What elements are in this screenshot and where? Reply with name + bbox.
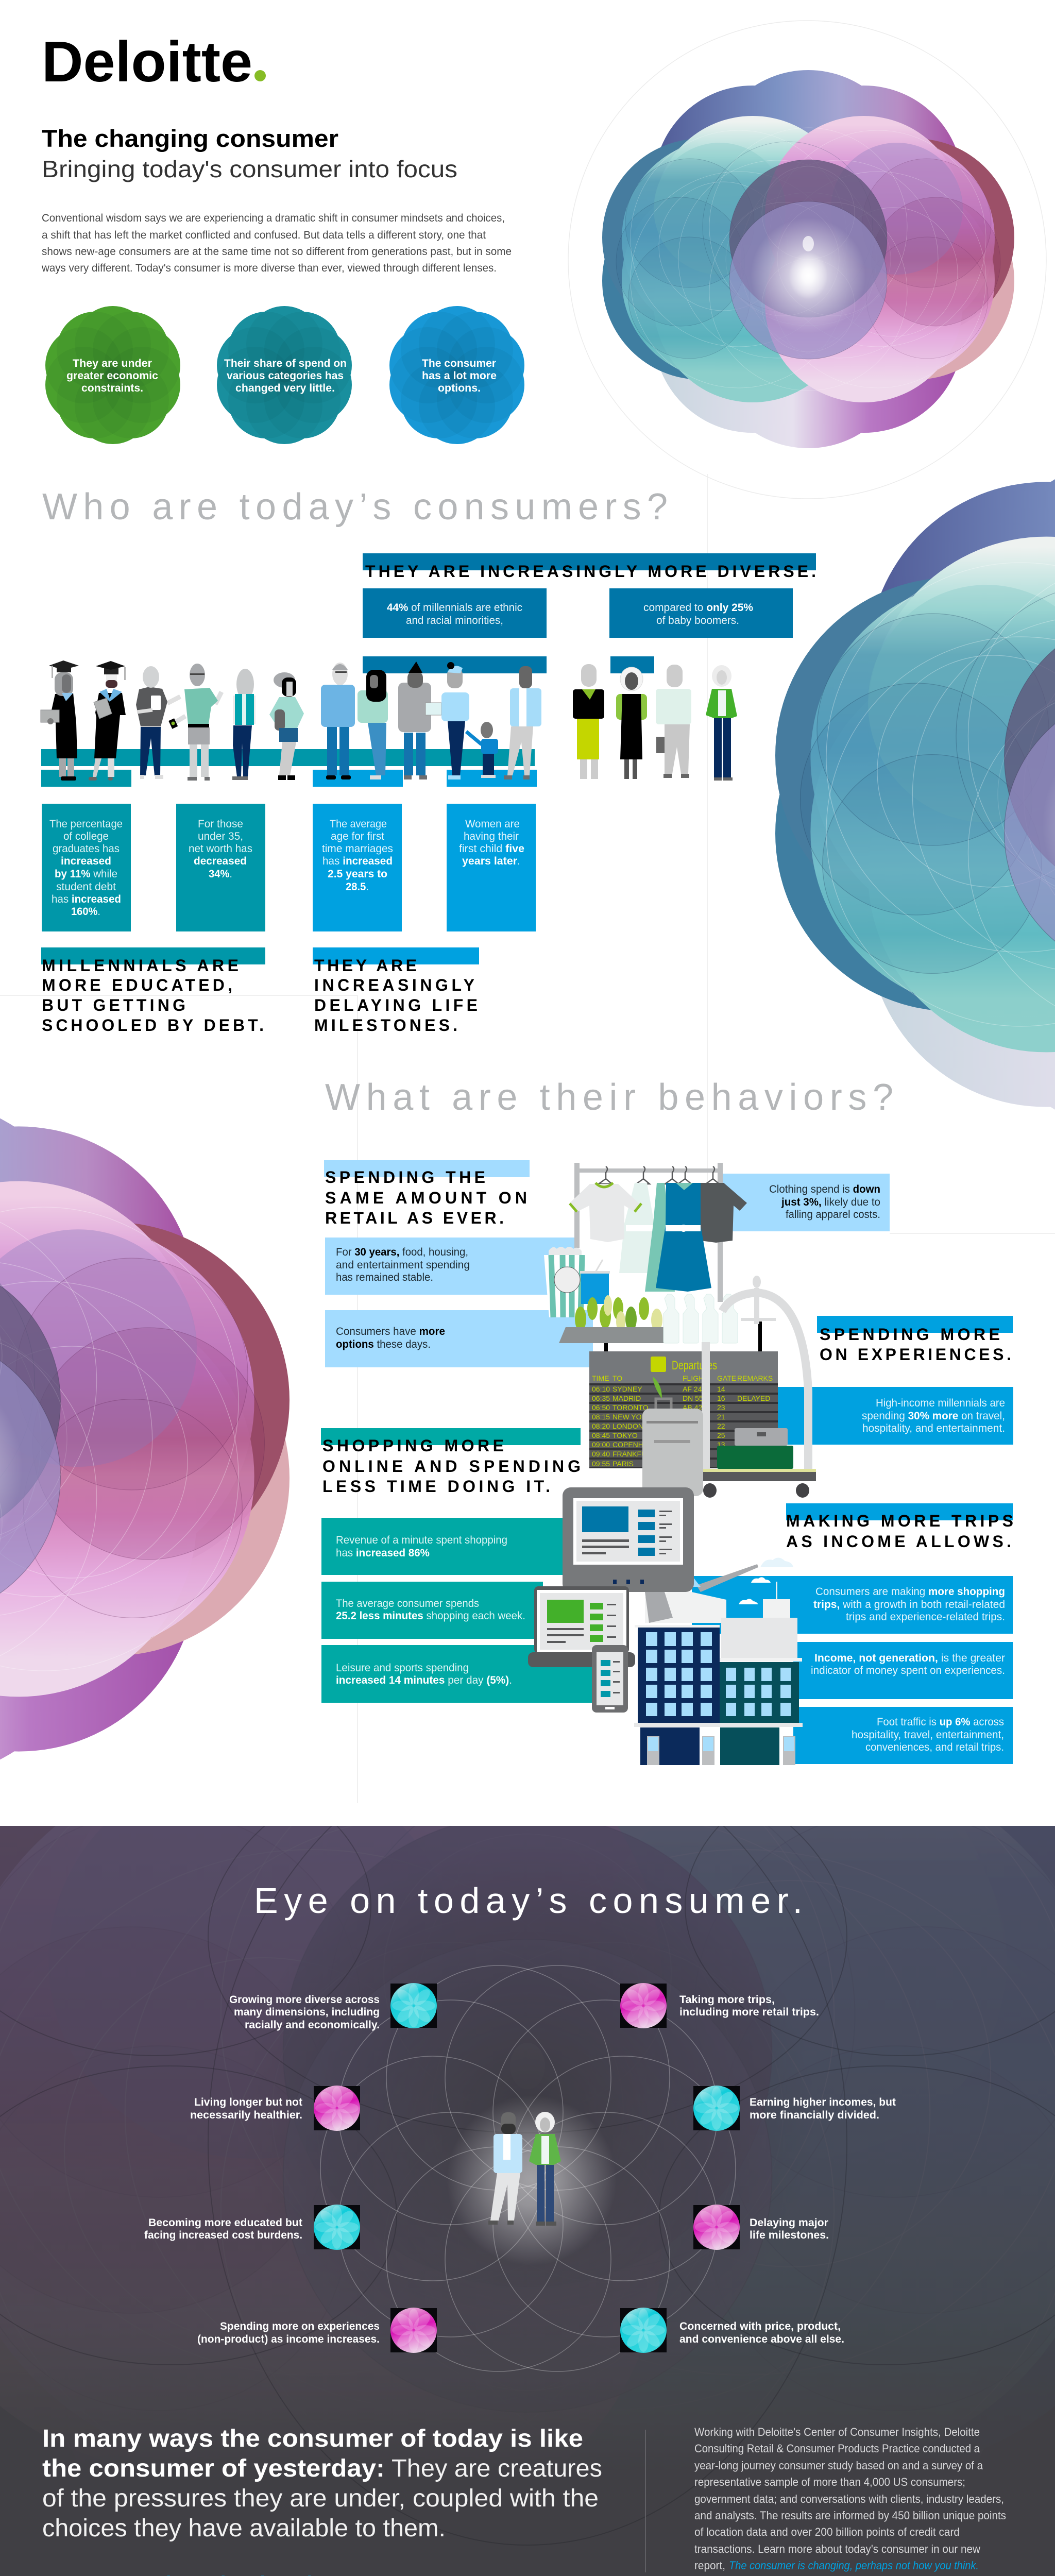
illustration: departures board: TIME [592, 1374, 609, 1382]
text box: clothing spend: falling apparel costs. [786, 1209, 880, 1221]
illustration: pears crate [559, 1295, 670, 1343]
heading: shopping online: LESS TIME DOING IT. [322, 1477, 550, 1496]
illustration: man in hoodie [398, 662, 441, 779]
text box: more options: options these days. [336, 1338, 431, 1350]
text box: foot traffic [793, 1707, 1013, 1764]
illustration: man in blue shirt [321, 663, 355, 779]
illustration: departures board: 14 [717, 1385, 725, 1393]
heading: delaying life milestones: THEY ARE [314, 956, 417, 975]
badge: share of spend [217, 306, 352, 444]
methodology paragraph: report, [694, 2559, 725, 2572]
stat box: net worth [176, 804, 265, 931]
stat box: millennials minorities: 44% of millennials are ethnic [387, 602, 522, 614]
text box: shopping trips: Consumers are making more shopping [815, 1586, 1005, 1598]
methodology paragraph: representative sample of more than 4,000 US consumers; [694, 2476, 965, 2488]
item: higher incomes: more financially divided. [750, 2109, 879, 2121]
text box: less minutes: The average consumer spends [336, 1598, 479, 1609]
illustration: couple [488, 2112, 561, 2226]
heading: making more trips: AS INCOME ALLOWS. [786, 1532, 1011, 1551]
illustration: departures board: 25 [717, 1431, 725, 1439]
text box: revenue per minute: has increased 86% [336, 1547, 430, 1559]
heading: delaying life milestones: DELAYING LIFE [314, 996, 478, 1014]
item: living longer [190, 2086, 360, 2131]
text box: clothing spend: Clothing spend is down [769, 1183, 880, 1195]
heading: shopping online [321, 1428, 581, 1496]
item: higher incomes [693, 2086, 896, 2131]
stat box: first child: having their [464, 831, 519, 842]
illustration: departures board: FRANKFURT [612, 1450, 656, 1458]
illustration: man with tablet [136, 666, 180, 779]
illustration: milk bottles [663, 1294, 738, 1343]
stat box: first child: first child five [459, 843, 524, 855]
methodology paragraph: transactions. Learn more about today's consumer in our new [694, 2543, 980, 2555]
stat box: baby boomers: compared to only 25% [643, 602, 753, 614]
text box: more options [325, 1310, 593, 1367]
conclusion statement: They are creatures [392, 2455, 602, 2482]
stat box: first child: years later. [462, 855, 520, 867]
illustration: departures board: DN 55 [683, 1394, 703, 1402]
item: delaying milestones: life milestones. [750, 2229, 829, 2241]
heading: delaying life milestones [313, 947, 479, 1035]
item: living longer: necessarily healthier. [190, 2109, 302, 2121]
text box: high-income millennials [773, 1387, 1013, 1445]
text box: less minutes: 25.2 less minutes shopping each week. [336, 1610, 525, 1622]
methodology paragraph: year-long journey consumer study based on and a survey of a [694, 2459, 983, 2472]
stat box: college graduates: has increased [52, 893, 121, 905]
illustration: top flower [602, 70, 1014, 448]
text box: income not generation: indicator of money spent on experiences. [811, 1665, 1005, 1676]
illustration: departures board: Departures [672, 1359, 717, 1372]
heading: delaying life milestones: INCREASINGLY [314, 976, 474, 994]
stat box: college graduates: student debt [56, 881, 116, 893]
heading: making more trips: MAKING MORE TRIPS [786, 1512, 1013, 1530]
heading: eye on today's consumer: Eye on today’s consumer. [254, 1880, 803, 1921]
illustration: graduate woman [41, 660, 79, 781]
illustration: departures board: AF 247 [683, 1385, 706, 1393]
text box: 30 years: and entertainment spending [336, 1259, 470, 1271]
stat box: millennials minorities: and racial minorities, [406, 615, 503, 626]
stat box: millennials minorities [363, 588, 547, 638]
heading: millennials: MILLENNIALS ARE [42, 956, 239, 975]
badge: economic constraints: They are under [73, 358, 152, 369]
item: educated: facing increased cost burdens. [144, 2229, 302, 2241]
illustration: departures board: 09:00 [592, 1440, 610, 1449]
text box: clothing spend: just 3%, likely due to [781, 1196, 880, 1208]
faint background rings and guide lines [0, 21, 1055, 1803]
text box: 30 years: For 30 years, food, housing, [336, 1246, 468, 1258]
stat box: net worth: decreased [194, 855, 247, 867]
stat box: baby boomers [609, 588, 793, 638]
heading: more on experiences: SPENDING MORE [820, 1325, 1000, 1344]
illustration: desktop monitor [563, 1487, 694, 1623]
divider [645, 2430, 646, 2572]
stat box: college graduates: of college [63, 831, 109, 842]
illustration: smartphone [592, 1645, 628, 1713]
heading: millennials: SCHOOLED BY DEBT. [42, 1016, 264, 1035]
item: trips: including more retail trips. [679, 2006, 819, 2018]
stat box: first child [447, 804, 536, 931]
conclusion statement [42, 2425, 602, 2542]
illustration: departures board: 23 [717, 1403, 725, 1412]
illustration: graduate man [89, 661, 126, 781]
illustration: woman black dress [616, 667, 647, 779]
methodology paragraph: The consumer is changing, perhaps not how you think. [729, 2559, 979, 2572]
methodology paragraph [694, 2426, 1006, 2572]
text box: 30 years [325, 1238, 577, 1295]
illustration: departures board: LONDON [612, 1422, 643, 1430]
title [42, 125, 457, 182]
stat box: first marriages: 2.5 years to [328, 868, 387, 880]
methodology paragraph: Working with Deloitte's Center of Consumer Insights, Deloitte [694, 2426, 980, 2438]
item: higher incomes: Earning higher incomes, but [750, 2096, 896, 2108]
badge: share of spend: changed very little. [235, 382, 335, 394]
illustration: right flower [775, 454, 1055, 1135]
heading: increasingly diverse [363, 553, 816, 581]
stat box: first marriages [313, 804, 402, 931]
illustration: departures board: 16 [717, 1394, 725, 1402]
conclusion statement: In many ways the consumer of today is like [42, 2425, 583, 2452]
heading: shopping online: SHOPPING MORE [322, 1436, 504, 1455]
illustration: departures board: 09:40 [592, 1450, 610, 1458]
intro paragraph: Conventional wisdom says we are experiencing a dramatic shift in consumer mindsets and choices, [42, 212, 505, 224]
illustration: departures board: SYDNEY [612, 1385, 642, 1393]
stat box: first marriages: 28.5. [346, 881, 369, 893]
illustration: woman with backpack [269, 672, 304, 780]
badge: more options [389, 306, 524, 444]
heading: making more trips [786, 1503, 1013, 1551]
illustration: departures board: 09:55 [592, 1460, 610, 1468]
illustration: departures board: REMARKS [737, 1374, 773, 1382]
illustration: older man lime trousers [573, 664, 604, 779]
stat box: college graduates [42, 804, 131, 931]
methodology paragraph: government data; and conversations with clients, industry leaders, [694, 2493, 1004, 2505]
text box: foot traffic: conveniences, and retail trips. [865, 1741, 1004, 1753]
heading: who are today's consumers: Who are today’s consumers? [42, 486, 668, 528]
illustration: man with bag [656, 665, 691, 778]
item: living longer: Living longer but not [194, 2096, 302, 2108]
text box: leisure and sports [321, 1645, 594, 1703]
item: trips [620, 1983, 819, 2028]
heading: spending the same on retail [324, 1160, 530, 1227]
heading: what are their behaviors: What are their behaviors? [325, 1077, 893, 1118]
illustration: departures board: TOKYO [612, 1431, 638, 1439]
heading: spending the same on retail: SAME AMOUNT ON [325, 1189, 527, 1207]
illustration: woman green jacket [706, 665, 737, 781]
heading: shopping online: ONLINE AND SPENDING [322, 1457, 581, 1476]
heading: more on experiences: ON EXPERIENCES. [820, 1345, 1011, 1364]
item: educated [144, 2205, 360, 2250]
illustration: city skyline [634, 1557, 803, 1765]
text box: clothing spend [721, 1174, 890, 1231]
item: experiences [197, 2308, 437, 2353]
item: diverse [229, 1983, 437, 2031]
item: delaying milestones [693, 2205, 829, 2250]
stat box: college graduates: 160%. [71, 906, 100, 918]
badge: economic constraints: greater economic [66, 370, 158, 382]
methodology paragraph: Consulting Retail & Consumer Products Practice conducted a [694, 2442, 980, 2455]
text box: leisure and sports: Leisure and sports spending [336, 1662, 469, 1674]
stat box: first marriages: time marriages [322, 843, 393, 855]
stat box: first marriages: has increased [322, 855, 393, 867]
text box: shopping trips [692, 1576, 1013, 1634]
text box: more options: Consumers have more [336, 1326, 445, 1337]
heading: delaying life milestones: MILESTONES. [314, 1016, 457, 1035]
item: educated: Becoming more educated but [148, 2217, 302, 2229]
item: price product convenience: Concerned with price, product, [679, 2320, 841, 2332]
illustration: man in blazer [504, 666, 541, 779]
illustration: departures board: MADRID [612, 1394, 641, 1402]
heading: millennials: BUT GETTING [42, 996, 185, 1014]
item: price product convenience [620, 2308, 844, 2353]
text box: foot traffic: hospitality, travel, entertainment, [852, 1729, 1004, 1741]
heading: more on experiences [817, 1316, 1013, 1364]
item: diverse: many dimensions, including [234, 2006, 380, 2018]
illustration: departures board: 08:20 [592, 1422, 610, 1430]
text box: leisure and sports: increased 14 minutes per day (5%). [336, 1674, 512, 1686]
badge: economic constraints: constraints. [81, 382, 143, 394]
text box: less minutes [321, 1582, 543, 1639]
badge: more options: The consumer [422, 358, 496, 369]
illustration: departures board: 06:50 [592, 1403, 610, 1412]
conclusion statement: of the pressures they are under, coupled with the [42, 2485, 599, 2512]
stat box: net worth: under 35, [198, 831, 243, 842]
illustration: grey suitcase [642, 1377, 703, 1496]
stat box: net worth: For those [198, 818, 243, 830]
heading: spending the same on retail: SPENDING THE [325, 1168, 485, 1187]
methodology paragraph: of location data and over 200 billion points of credit card [694, 2526, 960, 2538]
stat box: college graduates: increased [61, 855, 111, 867]
stat box: first child: Women are [465, 818, 520, 830]
stat box: net worth: net worth has [189, 843, 252, 855]
item: experiences: (non-product) as income increases. [197, 2333, 380, 2345]
illustration: departures board: TORONTO [612, 1403, 649, 1412]
illustration: departures board: FLIGHT [683, 1374, 708, 1382]
title: Bringing today's consumer into focus [42, 156, 457, 182]
text box: shopping trips: trips and experience-related trips. [846, 1611, 1005, 1623]
stat box: college graduates: The percentage [49, 818, 123, 830]
intro paragraph: shows new-age consumers are at the same time not so different from generations past, but in some [42, 246, 512, 258]
illustration: departures board: 06:10 [592, 1385, 610, 1393]
illustration: departures board: COPENHAGEN [612, 1440, 664, 1449]
heading: millennials: MORE EDUCATED, [42, 976, 232, 994]
illustration: departures board: PARIS [612, 1460, 634, 1468]
stat box: baby boomers: of baby boomers. [656, 615, 739, 626]
illustration: popcorn and drink [544, 1247, 610, 1317]
stat box: first marriages: age for first [331, 831, 384, 842]
rings around figures [320, 1965, 736, 2371]
illustration: departures board [589, 1321, 778, 1468]
badge: more options: options. [438, 382, 481, 394]
illustration: woman in mint top [358, 670, 388, 779]
illustration: departures board: 21 [717, 1413, 725, 1421]
badge: more options: has a lot more [422, 370, 497, 382]
illustration: departures board: AB 426 [683, 1403, 706, 1412]
methodology paragraph: and analysts. The results are informed by 450 billion unique points [694, 2509, 1006, 2522]
text box: 30 years: has remained stable. [336, 1272, 433, 1283]
illustration: mother and child [441, 662, 498, 779]
conclusion statement: choices they have available to them. [42, 2515, 446, 2542]
center glow [447, 2095, 617, 2265]
heading: millennials [41, 947, 265, 1035]
item: delaying milestones: Delaying major [750, 2217, 828, 2229]
text box: revenue per minute: Revenue of a minute spent shopping [336, 1534, 507, 1546]
item: experiences: Spending more on experiences [220, 2320, 380, 2332]
text box: foot traffic: Foot traffic is up 6% across [877, 1716, 1004, 1728]
item: diverse: Growing more diverse across [229, 1994, 380, 2006]
stat box: first marriages: The average [330, 818, 387, 830]
illustration: man with phone [168, 664, 222, 781]
panel: dark consumer section [0, 1826, 1055, 2576]
badge: share of spend: various categories has [227, 370, 344, 382]
text box: income not generation [793, 1642, 1013, 1699]
illustration: clothing rack [570, 1163, 747, 1302]
illustration: departures board: TO [612, 1374, 622, 1382]
text box: high-income millennials: hospitality, and entertainment. [862, 1422, 1005, 1434]
illustration: departures board: 08:15 [592, 1413, 610, 1421]
intro paragraph: a shift that has left the market conflicted and confused. But data tells a different story, one that [42, 229, 486, 241]
badge: share of spend: Their share of spend on [224, 358, 347, 369]
title: The changing consumer [42, 125, 338, 152]
text box: high-income millennials: High-income millennials are [876, 1397, 1005, 1409]
logo: Deloitte: Deloitte [42, 30, 252, 94]
illustration: departures board: DELAYED [737, 1394, 770, 1402]
illustration: departures board: NEW YORK [612, 1413, 652, 1421]
text box: shopping trips: trips, with a growth in both retail-related [813, 1599, 1005, 1611]
illustration: departures board: 13 [717, 1440, 725, 1449]
item: trips: Taking more trips, [679, 1994, 775, 2006]
accent bars behind people [41, 656, 654, 787]
item: price product convenience: and convenience above all else. [679, 2333, 844, 2345]
heading: spending the same on retail: RETAIL AS EVER. [325, 1209, 504, 1227]
text box: income not generation: Income, not generation, is the greater [814, 1652, 1005, 1664]
illustration: woman in vest [232, 669, 256, 780]
stat box: net worth: 34%. [209, 868, 232, 880]
illustration: left flower [0, 1098, 290, 1780]
badge: economic constraints [45, 306, 180, 444]
illustration: departures board: 08:45 [592, 1431, 610, 1439]
text box: revenue per minute [321, 1518, 569, 1575]
text box: high-income millennials: spending 30% more on travel, [862, 1410, 1005, 1422]
heading: increasingly diverse: THEY ARE INCREASINGLY MORE DIVERSE. [365, 562, 816, 581]
item: diverse: racially and economically. [245, 2019, 380, 2031]
stat box: college graduates: by 11% while [55, 868, 117, 880]
illustration: departures board: 22 [717, 1422, 725, 1430]
intro paragraph: ways very different. Today's consumer is more diverse than ever, viewed through different lenses. [41, 262, 497, 274]
stat box: college graduates: graduates has [53, 843, 120, 855]
illustration: departures board: GATE [717, 1374, 736, 1382]
illustration: laptop [528, 1586, 635, 1667]
conclusion statement: the consumer of yesterday: [42, 2455, 385, 2482]
illustration: luggage cart [696, 1276, 816, 1498]
illustration: departures board: 06:35 [592, 1394, 610, 1402]
intro paragraph [41, 212, 512, 274]
